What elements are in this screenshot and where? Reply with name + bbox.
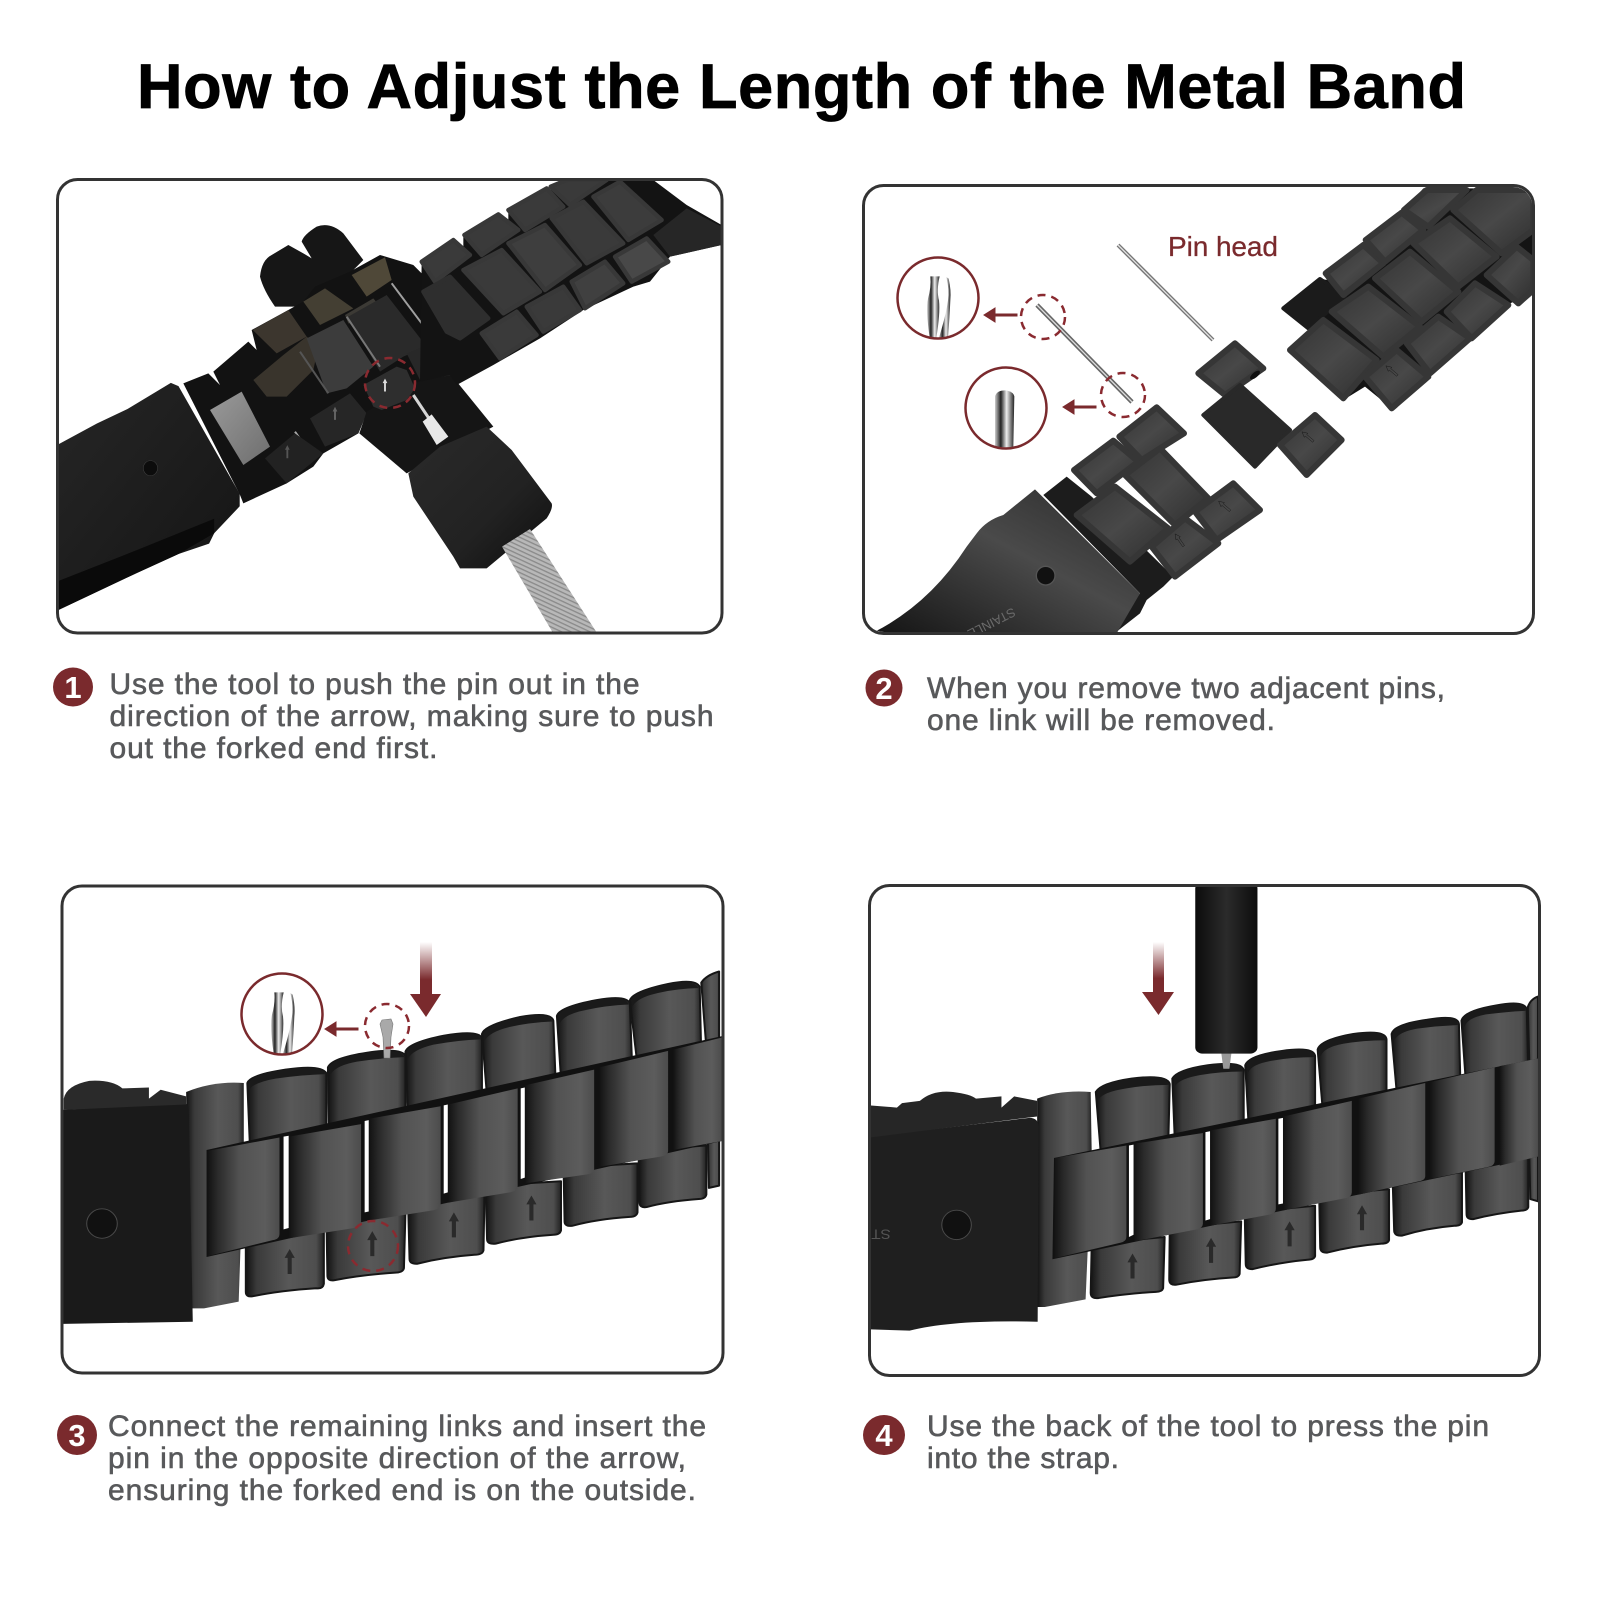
link arrows bbox=[1127, 1205, 1367, 1278]
top row links bbox=[247, 972, 719, 1146]
step 1 badge bbox=[53, 668, 93, 706]
clasp rivet bbox=[143, 461, 158, 476]
step 1 caption: out the forked end first. bbox=[110, 732, 438, 765]
step 3 caption: ensuring the forked end is on the outside. bbox=[108, 1474, 696, 1507]
plate of tool bbox=[359, 373, 493, 473]
down arrow bbox=[1142, 942, 1174, 1015]
zoom circle: forked end bbox=[898, 258, 978, 338]
step 2 badge bbox=[866, 670, 902, 706]
top knuckles bbox=[1281, 277, 1324, 330]
lower knuckles bbox=[1152, 518, 1218, 577]
screw thread bbox=[502, 529, 597, 633]
panel: step 2 photo, removed link and pin detail bbox=[864, 186, 1534, 648]
pin sticking out bbox=[380, 1019, 393, 1058]
left band silhouette bbox=[183, 255, 424, 504]
step 3 caption bbox=[108, 1410, 706, 1507]
white slits bbox=[284, 1088, 525, 1229]
bottom row links bbox=[246, 1139, 719, 1296]
link arrows bbox=[1173, 499, 1232, 548]
step 1 caption bbox=[110, 668, 714, 765]
link slits bbox=[294, 282, 421, 438]
step 1 badge: 1 bbox=[64, 670, 82, 705]
step 1 caption: Use the tool to push the pin out in the bbox=[110, 668, 640, 701]
bottom row links bbox=[1091, 1154, 1538, 1298]
pin head label: Pin head bbox=[1168, 231, 1278, 262]
clasp hole bbox=[87, 1209, 117, 1238]
clasp bbox=[61, 1103, 193, 1324]
tool pin tip bbox=[1221, 1053, 1231, 1069]
step 3 badge bbox=[57, 1415, 97, 1455]
zoom circle: round end bbox=[966, 368, 1046, 448]
clasp under links bbox=[1043, 477, 1173, 632]
loose pin bbox=[1118, 245, 1213, 340]
clasp bbox=[875, 489, 1140, 633]
step 4 badge: 4 bbox=[875, 1418, 893, 1453]
step 4 badge bbox=[863, 1415, 905, 1455]
pin with marked ends bbox=[1037, 305, 1132, 402]
link end faces bbox=[248, 982, 699, 1090]
step 3 caption: Connect the remaining links and insert the bbox=[108, 1410, 706, 1443]
clasp hole bbox=[1036, 566, 1055, 585]
step 2 caption: one link will be removed. bbox=[927, 704, 1275, 737]
link arrows bbox=[285, 1195, 537, 1274]
step 4 caption bbox=[927, 1410, 1489, 1475]
back of tool bbox=[1195, 882, 1257, 1054]
right band links bbox=[422, 180, 668, 358]
removed link bbox=[1198, 343, 1342, 475]
panel: step 4 photo, pressing pin in bbox=[870, 882, 1540, 1376]
step 4 caption: into the strap. bbox=[927, 1442, 1119, 1475]
center links bbox=[1125, 448, 1208, 525]
bottom knuckles bbox=[1365, 350, 1428, 408]
center bar shadow backing bbox=[1052, 1059, 1538, 1259]
step 3 caption: pin in the opposite direction of the arrow, bbox=[108, 1442, 686, 1475]
end link behind clasp bbox=[186, 1083, 244, 1308]
center bar shadow backing bbox=[207, 1036, 722, 1257]
right band silhouette bbox=[420, 180, 722, 385]
dashed marker on pin bbox=[365, 1004, 409, 1048]
dark center link bbox=[348, 295, 427, 372]
top row links bbox=[422, 180, 607, 282]
clasp bbox=[870, 1118, 1039, 1331]
end link behind clasp bbox=[1037, 1092, 1092, 1307]
clasp hole bbox=[942, 1210, 971, 1240]
zoom circle with forked pin bbox=[242, 974, 322, 1054]
marked knuckle bbox=[363, 367, 415, 410]
top row links bbox=[1096, 997, 1538, 1154]
lower knuckles bbox=[310, 393, 367, 447]
center links bbox=[1290, 320, 1377, 398]
clasp bbox=[59, 383, 240, 610]
dashed marker on link bbox=[348, 1221, 398, 1271]
clasp top hardware bbox=[870, 1092, 1037, 1137]
left arrow bbox=[325, 1022, 358, 1036]
pin collar bbox=[423, 414, 448, 445]
tool pin bbox=[413, 395, 430, 420]
upper knuckle with arrow bbox=[408, 350, 450, 380]
strap end bbox=[653, 208, 722, 257]
center links bbox=[423, 182, 662, 338]
link arrows bbox=[1300, 364, 1399, 444]
link end faces bbox=[1097, 1003, 1526, 1099]
step 2 caption bbox=[927, 672, 1445, 737]
dashed red marker bbox=[365, 358, 415, 408]
center bar segments bbox=[1054, 1059, 1538, 1258]
title: How to Adjust the Length of the Metal Band bbox=[137, 52, 1466, 122]
step 4 caption: Use the back of the tool to press the pin bbox=[927, 1410, 1489, 1443]
clasp lower edge bbox=[59, 519, 214, 610]
tinted reflections bbox=[253, 310, 307, 353]
step 3 badge: 3 bbox=[68, 1418, 86, 1453]
step 2 badge: 2 bbox=[875, 671, 893, 706]
center bar segments bbox=[208, 1038, 722, 1256]
upper right band silhouette bbox=[1324, 188, 1532, 399]
engraved text: ST bbox=[871, 1226, 891, 1241]
step 1 caption: direction of the arrow, making sure to push bbox=[110, 700, 714, 733]
small arrows bbox=[984, 308, 1096, 414]
polished link bbox=[210, 392, 270, 465]
dashed markers bbox=[1021, 295, 1145, 417]
upper knuckles bbox=[1074, 441, 1138, 493]
panel: step 3 photo, inserting pin bbox=[61, 886, 723, 1373]
engraved clasp text: STAINLESS bbox=[950, 605, 1018, 648]
step 2 caption: When you remove two adjacent pins, bbox=[927, 672, 1445, 705]
down arrow bbox=[410, 942, 441, 1017]
clasp top hardware bbox=[64, 1081, 186, 1110]
bottom row links bbox=[482, 238, 668, 358]
light center link bbox=[307, 320, 373, 393]
cylinder bbox=[408, 427, 552, 568]
tool head behind band bbox=[260, 225, 363, 307]
small arrows bbox=[285, 348, 437, 458]
panel: step 1 photo, pin tool on band bbox=[58, 180, 722, 633]
white slits bbox=[1129, 1118, 1283, 1237]
